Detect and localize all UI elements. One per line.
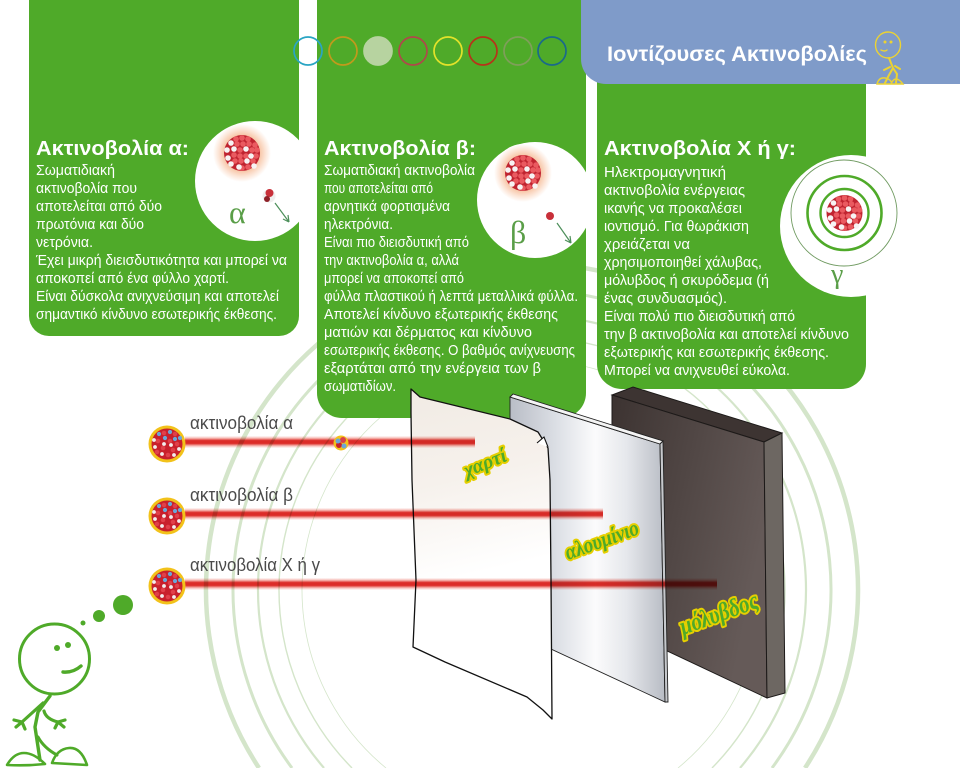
beta white circle illustration: β — [510, 214, 526, 250]
panel: beta radiation — [317, 0, 593, 418]
radiation ray: gamma — [185, 578, 717, 590]
source nucleus: gamma — [148, 568, 186, 604]
beta description: ματιών και δέρματος και κίνδυνο — [324, 325, 532, 341]
header tab — [581, 0, 960, 84]
paper sheet — [411, 389, 552, 719]
label: paper: χαρτί — [458, 444, 511, 483]
gamma description: μόλυβδος ή σκυρόδεμα (ή — [604, 273, 769, 289]
label: beta ray: ακτινοβολία β — [190, 485, 293, 505]
gamma description: ακτινοβολία ενέργειας — [604, 183, 745, 199]
alpha description: σημαντικό κίνδυνο εσωτερικής έκθεσης. — [36, 307, 277, 323]
gamma description: χρησιμοποιηθεί χάλυβας, — [604, 255, 762, 271]
label: alpha ray: ακτινοβολία α — [190, 413, 293, 433]
gamma description: χρειάζεται να — [604, 237, 690, 253]
gamma description: εξωτερικής και εσωτερικής έκθεσης. — [604, 345, 829, 361]
gamma heading: Ακτινοβολία Χ ή γ: — [604, 137, 796, 160]
aluminium sheet — [510, 394, 668, 702]
beta description: μπορεί να αποκοπεί από — [324, 271, 464, 287]
alpha white circle illustration — [195, 121, 315, 241]
beta description: Είναι πιο διεισδυτική από — [324, 235, 469, 251]
source nucleus: alpha — [148, 426, 186, 462]
icon: green stick figure — [7, 624, 90, 765]
alpha heading: Ακτινοβολία α: — [36, 137, 189, 160]
gamma description — [604, 165, 849, 379]
label: X and gamma ray: ακτινοβολία Χ ή γ — [190, 555, 320, 575]
beta description — [324, 163, 578, 395]
beta description: σωματιδίων. — [324, 379, 396, 395]
beta white circle illustration — [477, 142, 593, 258]
main title: Ιοντίζουσες Ακτινοβολίες — [607, 43, 867, 66]
gamma white circle illustration: γ — [830, 259, 843, 290]
alpha description: νετρόνια. — [36, 235, 93, 251]
label: aluminium: αλουμίνιο — [561, 515, 642, 565]
gamma description: ένας συνδυασμός). — [604, 291, 727, 307]
gamma description: Μπορεί να ανιχνευθεί εύκολα. — [604, 363, 790, 379]
beta description: αρνητικά φορτισμένα — [324, 199, 450, 215]
alpha description: πρωτόνια και δύο — [36, 217, 144, 233]
beta description: εξαρτάται από την ενέργεια των β — [324, 361, 541, 377]
alpha description: Είναι δύσκολα ανιχνεύσιμη και αποτελεί — [36, 289, 280, 305]
alpha description — [35, 163, 287, 323]
icon: yellow stick figure — [876, 32, 903, 84]
alpha description: αποτελείται από δύο — [36, 199, 162, 215]
alpha white circle illustration: α — [229, 194, 246, 230]
beta heading: Ακτινοβολία β: — [324, 137, 476, 160]
gamma description: Ηλεκτρομαγνητική — [604, 165, 726, 181]
label: lead: μόλυβδος — [674, 587, 762, 641]
gamma description: ικανής να προκαλέσει — [604, 201, 742, 217]
beta description: εσωτερικής έκθεσης. Ο βαθμός ανίχνευσης — [324, 343, 575, 359]
alpha description: ακτινοβολία που — [36, 181, 137, 197]
header decoration: row of coloured circles — [294, 37, 566, 65]
gamma description: Είναι πολύ πιο διεισδυτική από — [604, 309, 795, 325]
beta description: την ακτινοβολία α, αλλά — [324, 253, 459, 269]
alpha description: αποκοπεί από ένα φύλλο χαρτί. — [36, 271, 229, 287]
gamma description: ιοντισμό. Για θωράκιση — [604, 219, 749, 235]
beta description: φύλλα πλαστικού ή λεπτά μεταλλικά φύλλα. — [324, 289, 578, 305]
panel: alpha radiation — [29, 0, 315, 336]
beta description: ηλεκτρόνια. — [324, 217, 393, 233]
radiation ray: alpha — [185, 436, 475, 450]
beta description: Σωματιδιακή ακτινοβολία — [324, 163, 475, 179]
alpha particle on ray — [334, 436, 348, 450]
alpha description: Έχει μικρή διεισδυτικότητα και μπορεί να — [35, 253, 287, 269]
panel: X and gamma radiation — [597, 60, 922, 389]
thought bubbles — [80, 595, 133, 626]
source nucleus: beta — [148, 498, 186, 534]
beta description: που αποτελείται από — [324, 181, 433, 197]
alpha description: Σωματιδιακή — [36, 163, 115, 179]
lead sheet — [612, 387, 785, 698]
gamma description: την β ακτινοβολία και αποτελεί κίνδυνο — [604, 327, 849, 343]
background: concentric radiation rings — [206, 264, 858, 768]
gamma white circle illustration — [780, 155, 922, 297]
beta description: Αποτελεί κίνδυνο εξωτερικής έκθεσης — [324, 307, 558, 323]
radiation ray: beta — [185, 508, 603, 520]
